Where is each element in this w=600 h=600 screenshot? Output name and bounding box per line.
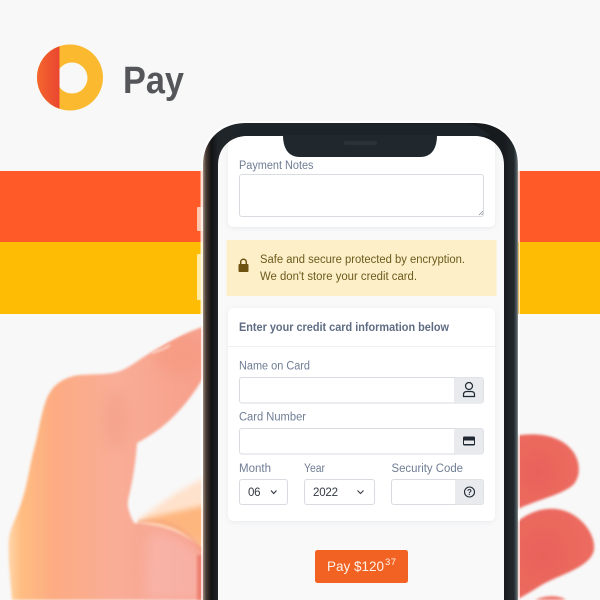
phone: [197, 121, 520, 600]
logo ring: red half: [37, 46, 60, 109]
label: name on card: Name on Card: [239, 360, 310, 372]
finger one: [516, 434, 579, 510]
yellow band: [0, 242, 600, 314]
select: month: 06: [248, 487, 260, 499]
label: month: Month: [239, 463, 271, 475]
panel: credit card form: [228, 308, 495, 521]
screen: [218, 136, 504, 600]
callout background: [226, 240, 496, 296]
input: security code: [392, 480, 484, 504]
orange band: [0, 171, 600, 242]
header divider: [228, 346, 495, 347]
label: security code: Security Code: [392, 463, 463, 475]
hand: palm finger behind: [136, 478, 205, 560]
hand shape: [9, 327, 205, 600]
textarea: [240, 174, 484, 216]
input: card number: [240, 428, 484, 454]
notch: [283, 135, 437, 157]
select: month: [240, 480, 288, 504]
tan strip on yellow band: [513, 242, 519, 314]
label: year: Year: [304, 463, 325, 475]
resize grip: [479, 211, 483, 215]
select: year: 2022: [313, 487, 338, 499]
select: year: [304, 480, 374, 504]
hand shading: [104, 335, 205, 600]
button label: Pay $120: [327, 558, 384, 574]
addon: help: ?: [467, 488, 472, 497]
label: card number: Card Number: [239, 412, 306, 424]
volume button top: [197, 207, 203, 231]
label: payment notes: Payment Notes: [239, 160, 314, 172]
button background: [315, 550, 408, 583]
panel: payment notes card: [228, 130, 495, 227]
icon: padlock: [238, 259, 248, 272]
card background: [228, 308, 495, 521]
form heading: Enter your credit card information below: [239, 322, 449, 334]
addon: user: [454, 378, 484, 403]
addon: credit card: [454, 428, 484, 454]
phone body left half: [203, 123, 361, 600]
notice line two: We don't store your credit card.: [260, 271, 417, 283]
logo ring: yellow: [37, 44, 103, 110]
callout: security notice: [226, 240, 496, 296]
finger orange shade: [140, 505, 205, 552]
hand: rear fingers right: [516, 434, 594, 600]
volume button bottom: [197, 254, 202, 300]
hand: thumb and palm: [9, 327, 205, 600]
input: name on card: [240, 378, 484, 403]
top frame: [232, 124, 490, 136]
logo hole: [56, 62, 88, 94]
phone body right half: [360, 123, 518, 600]
white halo: [201, 121, 520, 600]
speaker: [344, 141, 377, 145]
pay button: [315, 550, 408, 583]
pale finger: [136, 478, 205, 560]
card background: [228, 130, 495, 227]
palm crease: [138, 521, 203, 552]
notice line one: Safe and secure protected by encryption.: [260, 254, 465, 266]
logo: [37, 44, 184, 110]
finger three: [535, 596, 566, 600]
finger two: [516, 509, 594, 600]
button cents: 37: [385, 557, 396, 568]
logo word: Pay: [123, 60, 184, 102]
addon: help: [455, 480, 484, 504]
notch shape: [283, 135, 437, 157]
side pale strip left: [200, 171, 204, 314]
